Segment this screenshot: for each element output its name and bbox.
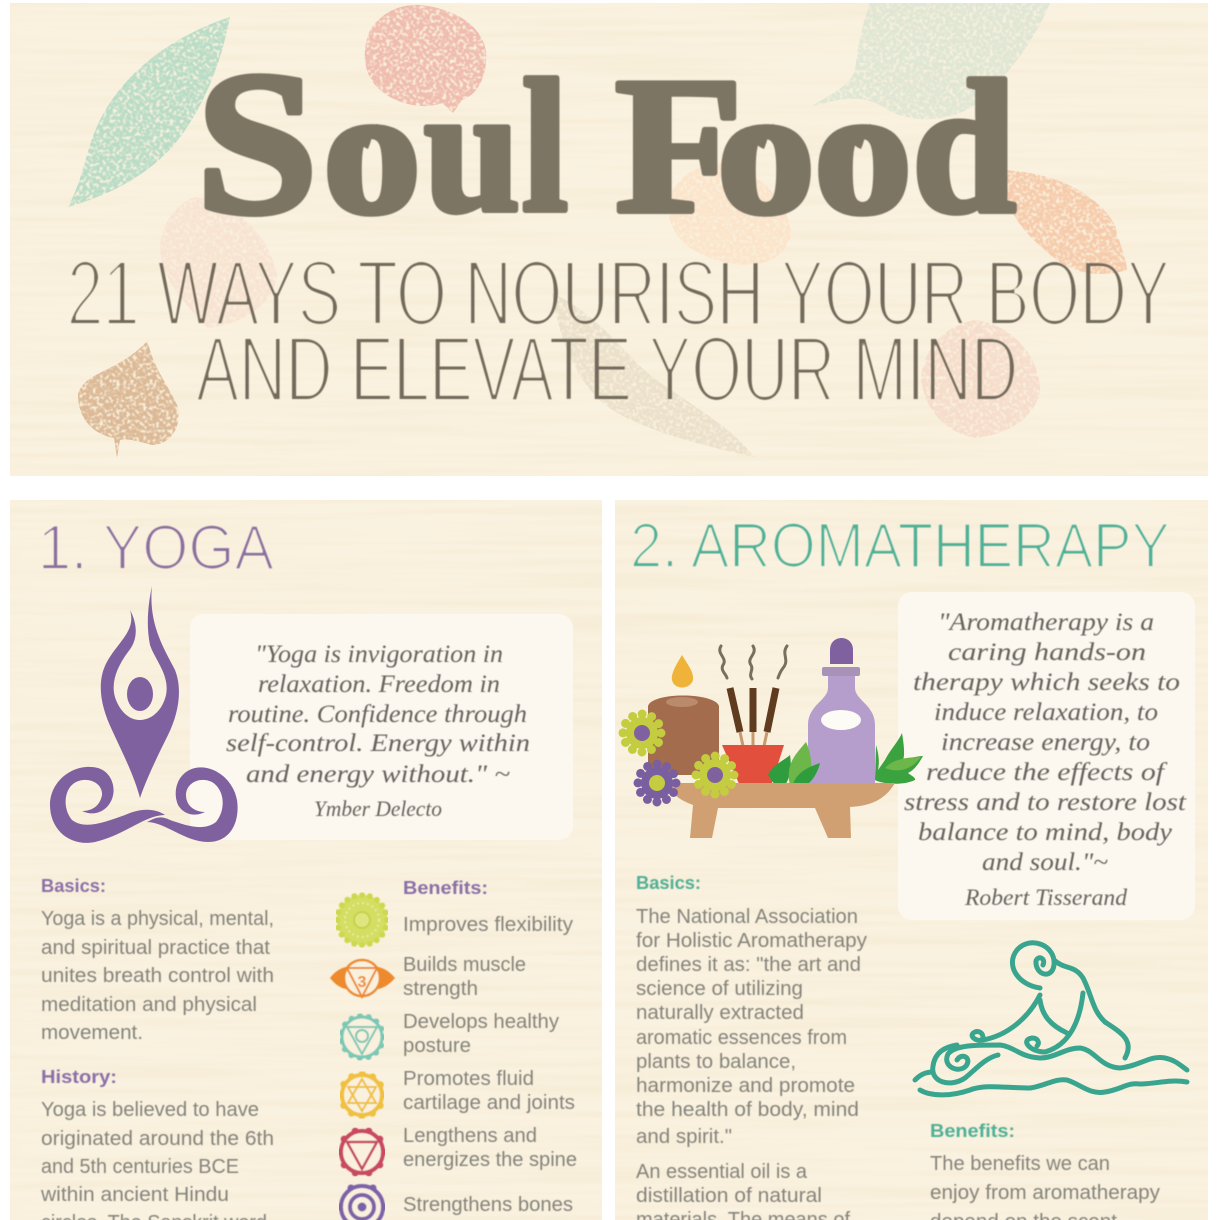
icon: yoga figure xyxy=(50,586,238,843)
title: S xyxy=(196,30,318,257)
yoga text: Builds muscle xyxy=(403,954,526,976)
yoga text: Yoga is a physical, mental, xyxy=(41,908,274,930)
quote box: yoga: Ymber Delecto xyxy=(314,796,442,821)
aromatherapy text: defines it as: "the art and xyxy=(636,954,861,976)
yoga text: Improves flexibility xyxy=(403,914,573,936)
yoga text: cartilage and joints xyxy=(403,1092,575,1114)
yoga text: originated around the 6th xyxy=(41,1128,274,1150)
quote box: yoga: routine. Confidence through xyxy=(228,701,527,728)
leaves xyxy=(68,3,1127,458)
flowers xyxy=(623,714,734,802)
title: d xyxy=(912,43,1016,253)
aromatherapy text: plants to balance, xyxy=(636,1051,796,1073)
yoga text: unites breath control with xyxy=(41,965,274,987)
quote box: yoga xyxy=(190,614,573,840)
yoga text: Basics: xyxy=(41,876,106,896)
quote box: aromatherapy: therapy which seeks to xyxy=(913,669,1180,696)
yoga text: meditation and physical xyxy=(41,994,257,1016)
yoga heading: 1. YOGA xyxy=(38,513,274,583)
quote box: aromatherapy: balance to mind, body xyxy=(918,819,1173,846)
icon: massage figure xyxy=(915,943,1187,1095)
yoga text: and spiritual practice that xyxy=(41,937,270,959)
quote box: aromatherapy: "Aromatherapy is a xyxy=(938,609,1154,636)
yoga text: History: xyxy=(41,1067,117,1087)
leaves xyxy=(768,733,923,785)
yoga text: Benefits: xyxy=(403,878,488,898)
subtitle xyxy=(67,241,1170,421)
aromatherapy text: science of utilizing xyxy=(636,978,803,1000)
yoga text: within ancient Hindu xyxy=(40,1184,229,1206)
tray xyxy=(668,783,895,838)
yoga text: energizes the spine xyxy=(403,1149,577,1171)
yoga text: posture xyxy=(403,1035,471,1057)
yoga text: Strengthens bones xyxy=(403,1194,573,1216)
title xyxy=(196,30,1016,257)
incense xyxy=(720,646,787,786)
aromatherapy text: An essential oil is a xyxy=(636,1161,808,1183)
quote box: aromatherapy: reduce the effects of xyxy=(926,759,1168,786)
title: l xyxy=(522,42,568,252)
yoga text: strength xyxy=(403,978,478,1000)
icon: chakra 5 xyxy=(340,1130,384,1174)
title: o xyxy=(814,52,912,251)
aromatherapy text: harmonize and promote xyxy=(636,1075,855,1097)
title: o xyxy=(323,52,421,251)
yoga text: Lengthens and xyxy=(403,1125,537,1147)
aromatherapy text: The benefits we can xyxy=(930,1153,1110,1175)
icon: chakra 2: 3 xyxy=(358,974,367,991)
icon: chakra 3 xyxy=(341,1016,383,1058)
aromatherapy text xyxy=(636,873,1160,1220)
yoga text: and 5th centuries BCE xyxy=(41,1156,239,1178)
yoga text: Promotes fluid xyxy=(403,1068,534,1090)
quote box: aromatherapy xyxy=(898,592,1195,920)
yoga text: Develops healthy xyxy=(403,1011,559,1033)
yoga text xyxy=(40,876,577,1220)
quote box: aromatherapy: increase energy, to xyxy=(941,729,1150,756)
bottle xyxy=(808,638,875,783)
aromatherapy text: Basics: xyxy=(636,873,701,893)
aromatherapy heading: 2. AROMATHERAPY xyxy=(630,511,1170,581)
icon: chakra 1 xyxy=(337,895,387,945)
title: o xyxy=(717,52,815,251)
quote box: yoga: "Yoga is invigoration in xyxy=(255,641,503,668)
quote box: aromatherapy: caring hands-on xyxy=(948,639,1146,666)
quote box: aromatherapy: and soul."~ xyxy=(982,849,1109,876)
quote box: aromatherapy: stress and to restore lost xyxy=(904,789,1187,816)
aromatherapy text: the health of body, mind xyxy=(636,1099,859,1121)
aromatherapy text: for Holistic Aromatherapy xyxy=(636,930,867,952)
quote box: aromatherapy: induce relaxation, to xyxy=(934,699,1158,726)
yoga text: Yoga is believed to have xyxy=(41,1099,259,1121)
aromatherapy text: Benefits: xyxy=(930,1121,1015,1141)
quote box: yoga: relaxation. Freedom in xyxy=(258,671,500,698)
icon: aromatherapy still life xyxy=(623,638,923,838)
aromatherapy text: naturally extracted xyxy=(636,1002,804,1024)
icon: chakra 6 xyxy=(340,1185,384,1220)
panel: aromatherapy xyxy=(615,500,1208,1220)
panel: header xyxy=(10,3,1208,476)
quote box: yoga: and energy without." ~ xyxy=(246,761,511,788)
icon: chakra 4 xyxy=(341,1074,383,1116)
quote box: aromatherapy: Robert Tisserand xyxy=(964,885,1128,910)
panel: yoga xyxy=(10,500,602,1220)
aromatherapy text: enjoy from aromatherapy xyxy=(930,1182,1160,1204)
title: u xyxy=(424,50,520,249)
candle xyxy=(648,655,719,775)
aromatherapy text: The National Association xyxy=(636,906,858,928)
yoga text: movement. xyxy=(41,1022,143,1044)
quote box: yoga: self-control. Energy within xyxy=(226,730,530,757)
aromatherapy text: aromatic essences from xyxy=(636,1027,847,1049)
aromatherapy text: and spirit." xyxy=(636,1126,732,1148)
icon: chakra 2 xyxy=(330,960,395,997)
aromatherapy text: distillation of natural xyxy=(636,1185,822,1207)
title: F xyxy=(615,38,743,254)
